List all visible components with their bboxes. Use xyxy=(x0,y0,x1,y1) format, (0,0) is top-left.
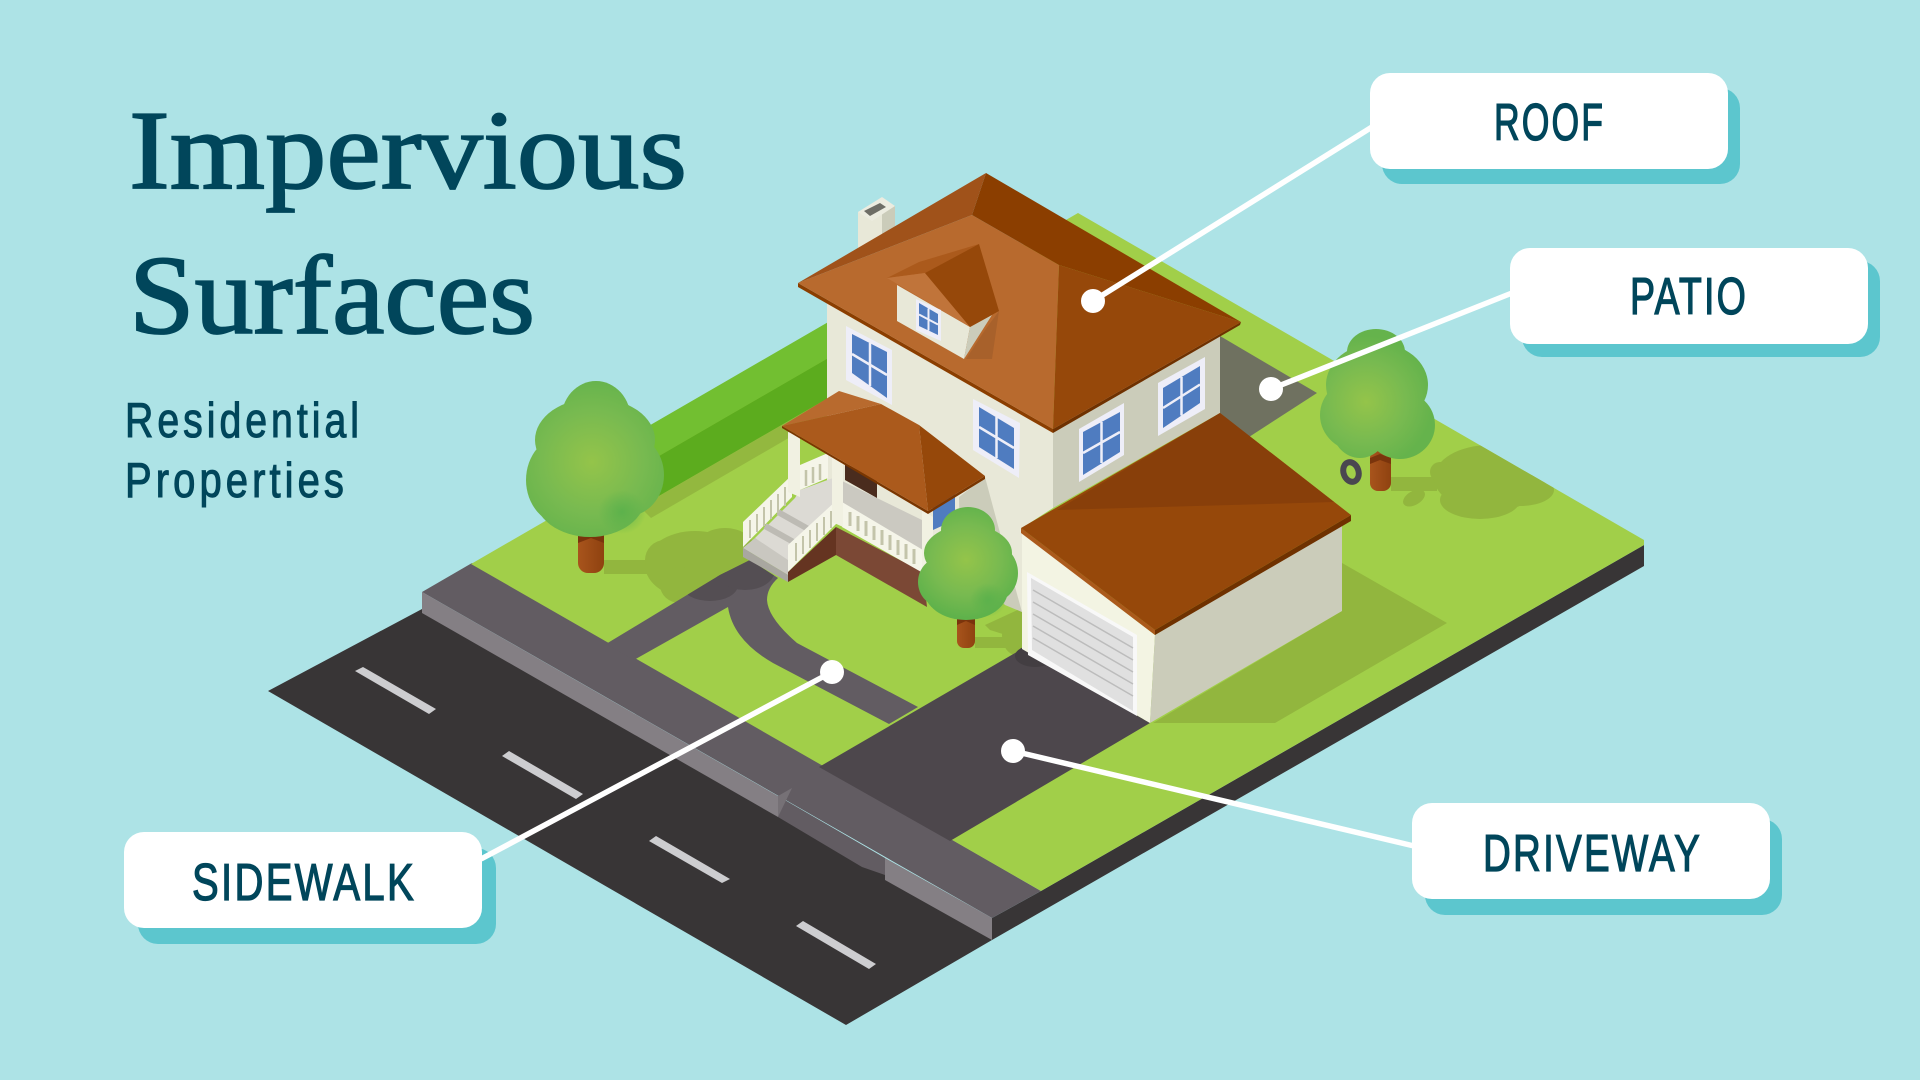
callout: roof: ROOF xyxy=(1494,94,1605,152)
dormer xyxy=(887,244,999,359)
title: Surfaces xyxy=(129,234,535,358)
subtitle: Properties xyxy=(125,454,348,508)
patio xyxy=(1220,336,1317,437)
hedge along back property line xyxy=(640,321,830,518)
garage xyxy=(1021,413,1351,723)
chimney xyxy=(858,197,895,250)
house walls xyxy=(827,296,1220,612)
window: side right xyxy=(1158,357,1205,436)
subtitle: Residential xyxy=(125,394,363,448)
tree: back with tire swing xyxy=(1320,329,1435,491)
tree shadow on walkway xyxy=(688,560,774,601)
callout: sidewalk: SIDEWALK xyxy=(192,854,416,912)
callout: driveway: DRIVEWAY xyxy=(1483,825,1702,883)
porch roof xyxy=(782,391,985,514)
subtitle xyxy=(125,394,363,508)
tree: front xyxy=(918,507,1018,648)
sidewalk and curb xyxy=(422,563,1041,940)
street with lane markings xyxy=(268,609,992,1025)
callout: patio xyxy=(1259,248,1880,401)
main roof xyxy=(798,173,1241,433)
callout: driveway xyxy=(1001,739,1782,915)
title xyxy=(129,89,687,358)
front porch and steps xyxy=(743,432,955,607)
front walkway xyxy=(606,560,918,724)
callout: sidewalk xyxy=(124,660,844,944)
tree: left xyxy=(526,381,664,573)
callout: patio: PATIO xyxy=(1630,268,1748,326)
window: front right xyxy=(973,399,1020,478)
ground slab side xyxy=(992,545,1644,940)
callout: roof xyxy=(1081,73,1740,313)
window: side left xyxy=(1079,403,1124,482)
title: Impervious xyxy=(129,89,687,213)
lawn xyxy=(471,213,1644,891)
window: front left xyxy=(846,326,892,405)
driveway xyxy=(819,645,1150,841)
tree and house shadows on lawn xyxy=(604,445,1554,723)
